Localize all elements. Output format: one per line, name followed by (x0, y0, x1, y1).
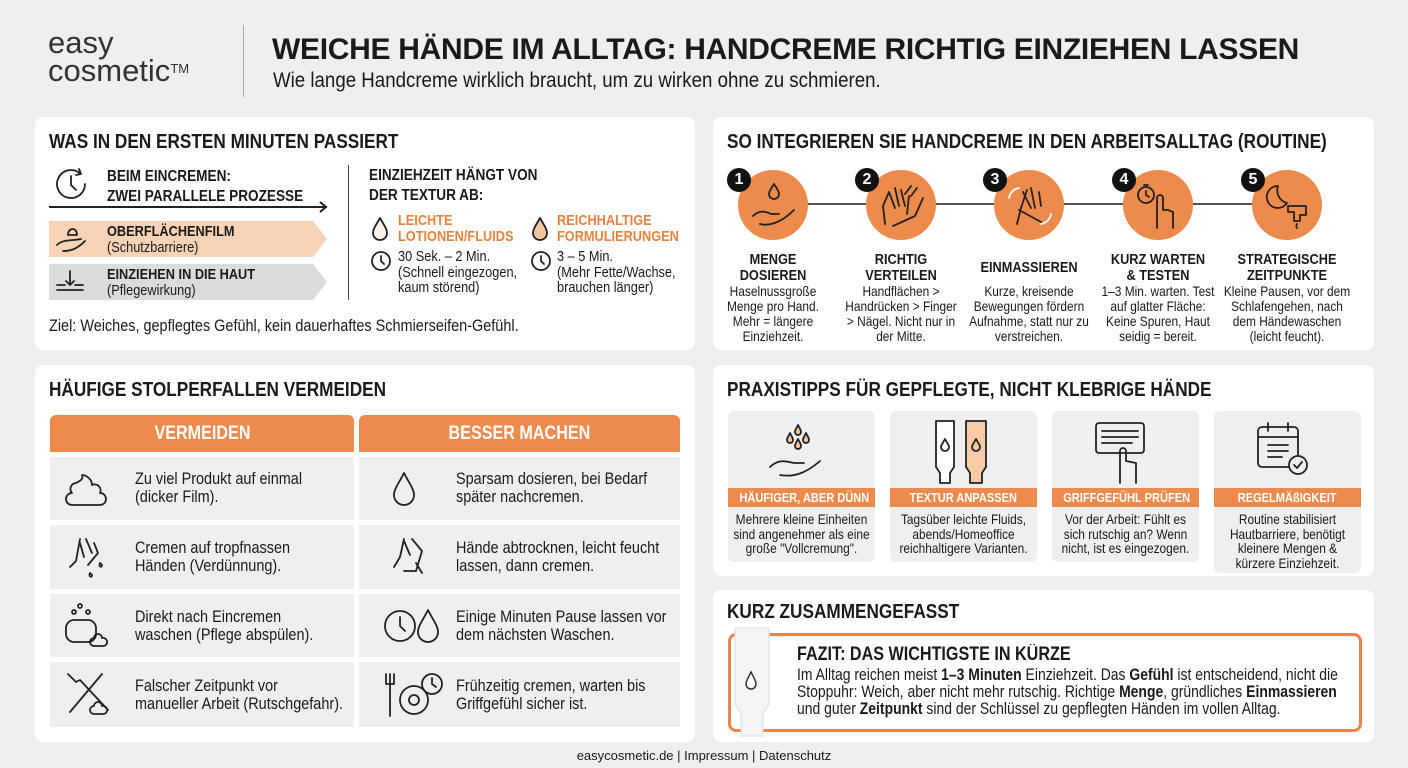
row 2: Hände abtrocknen, leicht feucht (456, 538, 659, 557)
row 4 (50, 662, 680, 727)
texture heading: DER TEXTUR AB: (369, 187, 483, 204)
rich textures: (Mehr Fette/Wachse, (557, 264, 676, 280)
subheading processes: BEIM EINCREMEN: (107, 168, 231, 185)
band: Einziehen: EINZIEHEN IN DIE HAUT (107, 266, 255, 283)
tip card 1 (728, 411, 875, 562)
step 2: Handflächen > Handrücken > Finger > Nägel. Nicht nur in der Mitte. (845, 283, 957, 344)
step 2: 2 (863, 171, 871, 188)
step 5: STRATEGISCHE (1238, 251, 1336, 268)
step 4 (1102, 168, 1214, 344)
rich textures (531, 212, 679, 296)
step 5 (1224, 168, 1350, 344)
panel: zusammenfassung (713, 590, 1374, 742)
row 3 (50, 594, 680, 657)
tip card 4: REGELMÄßIGKEIT (1238, 490, 1337, 505)
tip card 1: Mehrere kleine Einheiten sind angenehmer als eine große "Vollcremung". (733, 511, 870, 556)
tip card 3 (1052, 411, 1199, 562)
row 3: waschen (Pflege abspülen). (135, 625, 313, 644)
rich textures: REICHHALTIGE (557, 212, 652, 229)
row 1: später nachcremen. (456, 487, 584, 506)
step 2: VERTEILEN (865, 267, 937, 284)
step 4: & TESTEN (1126, 267, 1190, 284)
panel: stolperfallen (35, 365, 695, 742)
panel: erste Minuten (35, 117, 695, 350)
row 2: lassen, dann cremen. (456, 556, 594, 575)
tip card 2: TEXTUR ANPASSEN (910, 490, 1017, 505)
light textures: LEICHTE (398, 212, 453, 229)
row 3: dem nächsten Waschen. (456, 625, 614, 644)
subtitle: Wie lange Handcreme wirklich braucht, um zu wirken ohne zu schmieren. (273, 69, 881, 92)
row 4: Falscher Zeitpunkt vor (135, 676, 278, 695)
step 4: 4 (1120, 171, 1128, 188)
tip card 1: HÄUFIGER, ABER DÜNN (739, 490, 869, 505)
step 3 (969, 168, 1089, 344)
fazit box: Stoppuhr: Weich, aber nicht mehr rutschig. Richtige Menge, gründliches Einmassieren (797, 682, 1337, 701)
step 1: DOSIEREN (740, 267, 806, 284)
light textures: 30 Sek. – 2 Min. (398, 248, 490, 265)
title: WEICHE HÄNDE IM ALLTAG: HANDCREME RICHTIG EINZIEHEN LASSEN (272, 33, 1299, 66)
step 1: Haselnussgroße Menge pro Hand. Mehr = längere Einziehzeit. (727, 283, 819, 344)
heading: KURZ ZUSAMMENGEFASST (727, 601, 959, 623)
texture heading (369, 166, 537, 204)
table header (50, 415, 354, 452)
logo: easy (48, 25, 113, 60)
step 2: RICHTIG (875, 251, 927, 268)
tip card 3: Vor der Arbeit: Fühlt es sich rutschig an? Wenn nicht, ist es eingezogen. (1062, 511, 1189, 556)
rich textures: brauchen länger) (557, 279, 653, 296)
row 1: (dicker Film). (135, 487, 218, 506)
heading: PRAXISTIPPS FÜR GEPFLEGTE, NICHT KLEBRIGE HÄNDE (727, 379, 1212, 401)
fazit box: FAZIT: DAS WICHTIGSTE IN KÜRZE (797, 644, 1071, 665)
logo: cosmeticTM (48, 53, 189, 88)
icon: clock (56, 168, 86, 199)
heading: SO INTEGRIEREN SIE HANDCREME IN DEN ARBEITSALLTAG (ROUTINE) (727, 131, 1327, 153)
step 2 (845, 168, 957, 344)
step 1: MENGE (750, 251, 796, 268)
step 3: 3 (991, 171, 999, 188)
heading: HÄUFIGE STOLPERFALLEN VERMEIDEN (49, 379, 386, 401)
step 4: KURZ WARTEN (1111, 251, 1205, 268)
panel: praxistipps (713, 365, 1374, 576)
band: Oberflächenfilm: OBERFLÄCHENFILM (107, 223, 234, 240)
band: Einziehen (49, 264, 327, 300)
light textures: LOTIONEN/FLUIDS (398, 228, 513, 245)
row 4: Griffgefühl sicher ist. (456, 694, 587, 713)
row 4: Frühzeitig cremen, warten bis (456, 676, 646, 695)
row 3: Direkt nach Eincremen (135, 607, 281, 626)
step 3: Kurze, kreisende Bewegungen fördern Aufnahme, statt nur zu verstreichen. (969, 283, 1089, 344)
subheading processes (107, 168, 303, 205)
row 2: Händen (Verdünnung). (135, 556, 281, 575)
fazit box: Im Alltag reichen meist 1–3 Minuten Einziehzeit. Das Gefühl ist entscheidend, nicht die (797, 665, 1338, 684)
goal text: Ziel: Weiches, gepflegtes Gefühl, kein dauerhaftes Schmierseifen-Gefühl. (49, 316, 519, 335)
rich textures: FORMULIERUNGEN (557, 228, 679, 245)
icon: cream tube (734, 628, 770, 736)
subheading processes: ZWEI PARALLELE PROZESSE (107, 188, 303, 205)
band: Einziehen: (Pflegewirkung) (107, 282, 196, 299)
tip card 4 (1214, 411, 1361, 573)
panel: stolperfallen: BESSER MACHEN (449, 423, 590, 444)
row 2 (50, 525, 680, 589)
row 1: Sparsam dosieren, bei Bedarf (456, 469, 647, 488)
texture heading: EINZIEHZEIT HÄNGT VON (369, 167, 537, 184)
row 1: Zu viel Produkt auf einmal (135, 469, 302, 488)
light textures (371, 212, 517, 296)
logo (48, 25, 189, 88)
row 2: Cremen auf tropfnassen (135, 538, 290, 557)
tip card 3: GRIFFGEFÜHL PRÜFEN (1063, 490, 1190, 505)
light textures: kaum störend) (398, 279, 479, 296)
heading: WAS IN DEN ERSTEN MINUTEN PASSIERT (49, 131, 398, 153)
light textures: (Schnell eingezogen, (398, 264, 517, 280)
step 4: 1–3 Min. warten. Test auf glatter Fläche: Keine Spuren, Haut seidig = bereit. (1102, 283, 1214, 344)
panel: routine (713, 117, 1374, 350)
row 4: manueller Arbeit (Rutschgefahr). (135, 694, 343, 713)
rich textures: 3 – 5 Min. (557, 248, 613, 265)
step 5: ZEITPUNKTE (1247, 267, 1327, 284)
step 1: 1 (735, 171, 743, 188)
step 1 (727, 168, 819, 344)
step 3: EINMASSIEREN (980, 259, 1078, 276)
band: Oberflächenfilm: (Schutzbarriere) (107, 239, 198, 256)
row 3: Einige Minuten Pause lassen vor (456, 607, 666, 626)
tip card 2 (890, 411, 1037, 562)
fazit box: und guter Zeitpunkt sind der Schlüssel zu gepflegten Händen im vollen Alltag. (797, 699, 1281, 718)
step 5: 5 (1249, 171, 1257, 188)
row 1 (50, 457, 680, 520)
arrow (49, 201, 328, 213)
table header: VERMEIDEN (154, 423, 250, 444)
fazit box (728, 633, 1362, 732)
tip card 2: Tagsüber leichte Fluids, abends/Homeoffice reichhaltigere Varianten. (899, 511, 1028, 556)
step 5: Kleine Pausen, vor dem Schlafengehen, nach dem Händewaschen (leicht feucht). (1224, 283, 1350, 344)
band: Oberflächenfilm (49, 221, 327, 257)
tip card 4: Routine stabilisiert Hautbarriere, benötigt kleinere Mengen & kürzere Einziehzeit. (1230, 511, 1345, 570)
footer: easycosmetic.de | Impressum | Datenschutz (577, 748, 831, 763)
